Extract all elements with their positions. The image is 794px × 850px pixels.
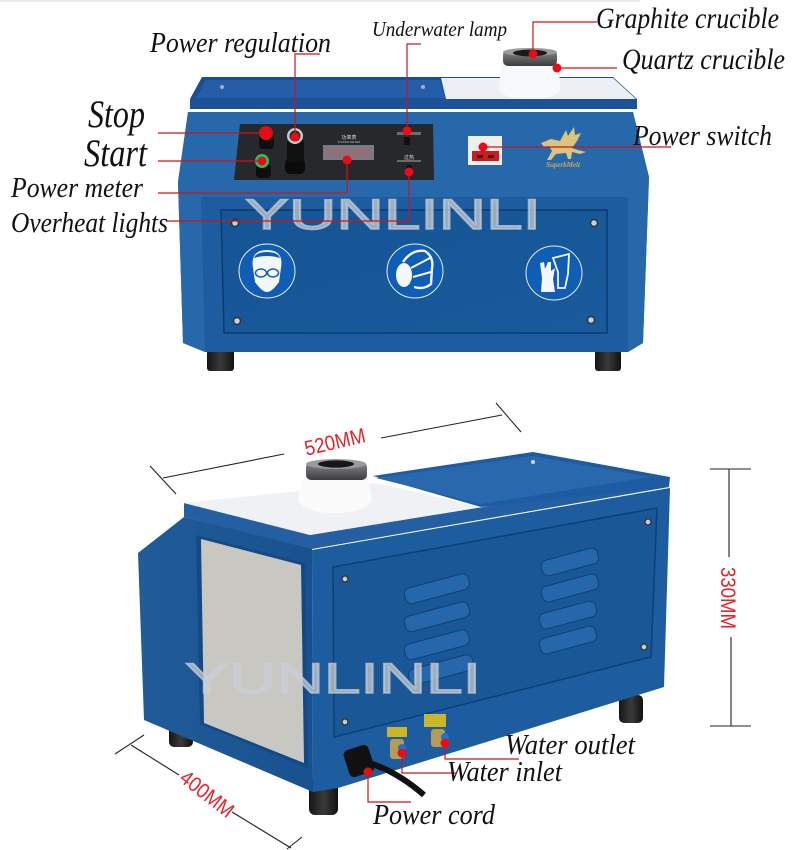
power meter display <box>323 134 374 160</box>
overheat light: 过热 <box>404 154 414 161</box>
start button <box>255 154 271 178</box>
quartz crucible <box>499 64 560 99</box>
power meter display: 功率表 <box>341 134 357 141</box>
bottom callout lines <box>368 743 519 802</box>
rear door <box>333 508 657 737</box>
label: stop: Stop <box>88 93 145 136</box>
top callout dots <box>258 50 562 176</box>
icon: respirator sign <box>387 244 443 298</box>
body upper slanted face <box>178 112 649 197</box>
door screws <box>232 220 598 324</box>
dimension: height 330MM <box>710 469 751 726</box>
label: power meter: Power meter <box>10 173 143 204</box>
graphite crucible <box>306 459 367 480</box>
blue tray <box>373 452 670 507</box>
power switch <box>468 136 502 165</box>
overheat light <box>397 154 421 171</box>
watermark: top: YUNLINLI <box>245 191 541 239</box>
label: water inlet: Water inlet <box>447 757 563 788</box>
quartz crucible <box>298 478 372 513</box>
rear face <box>312 488 670 792</box>
dimension: width 520MM: 520MM <box>302 424 368 461</box>
brand logo <box>541 127 586 169</box>
label: underwater lamp: Underwater lamp <box>372 17 507 41</box>
label: water outlet: Water outlet <box>505 730 636 761</box>
filter panel <box>201 539 304 763</box>
label: power switch: Power switch <box>632 120 772 152</box>
power regulation knob <box>285 128 305 174</box>
dimension: width 520MM <box>150 403 521 494</box>
right bevel <box>628 177 649 352</box>
dimension: depth 400MM <box>115 735 302 849</box>
label: overheat lights: Overheat lights <box>11 208 168 239</box>
vents <box>403 547 600 686</box>
icon: safety goggles sign <box>239 244 295 298</box>
top tray <box>190 77 637 109</box>
underwater lamp switch <box>397 132 421 145</box>
feet <box>207 350 621 371</box>
bottom machine: rear three-quarter view <box>138 452 670 815</box>
white cover plate <box>441 78 636 99</box>
label: power regulation: Power regulation <box>149 27 331 59</box>
power cord <box>342 744 424 795</box>
feet <box>169 695 643 815</box>
machine body <box>178 112 649 352</box>
left bevel <box>178 182 205 352</box>
label: start: Start <box>84 132 148 175</box>
label: power cord: Power cord <box>372 800 496 831</box>
power meter display: POWER METER <box>338 140 361 144</box>
rear screws <box>342 519 651 725</box>
filter frame <box>196 535 308 768</box>
top edge band <box>184 477 669 549</box>
left side face <box>138 517 313 792</box>
control panel <box>234 124 434 180</box>
crucible <box>298 459 372 513</box>
brand logo: SuperbMelt <box>546 161 581 169</box>
dimension: depth 400MM: 400MM <box>175 766 238 823</box>
watermark: bottom: YUNLINLI <box>185 655 481 703</box>
crucible <box>499 48 560 99</box>
stop button <box>259 126 274 149</box>
dimension: height 330MM: 330MM <box>716 567 739 629</box>
door panel <box>221 210 607 333</box>
water fittings <box>390 729 449 759</box>
top callout lines <box>158 22 671 221</box>
bottom callout dots <box>364 738 450 776</box>
white cover plate <box>184 483 481 535</box>
graphite crucible <box>503 48 557 66</box>
yellow port labels <box>387 714 446 737</box>
icon: protective gloves sign <box>526 246 582 300</box>
top machine: front view <box>178 48 649 371</box>
body lower front bevel <box>201 197 628 352</box>
